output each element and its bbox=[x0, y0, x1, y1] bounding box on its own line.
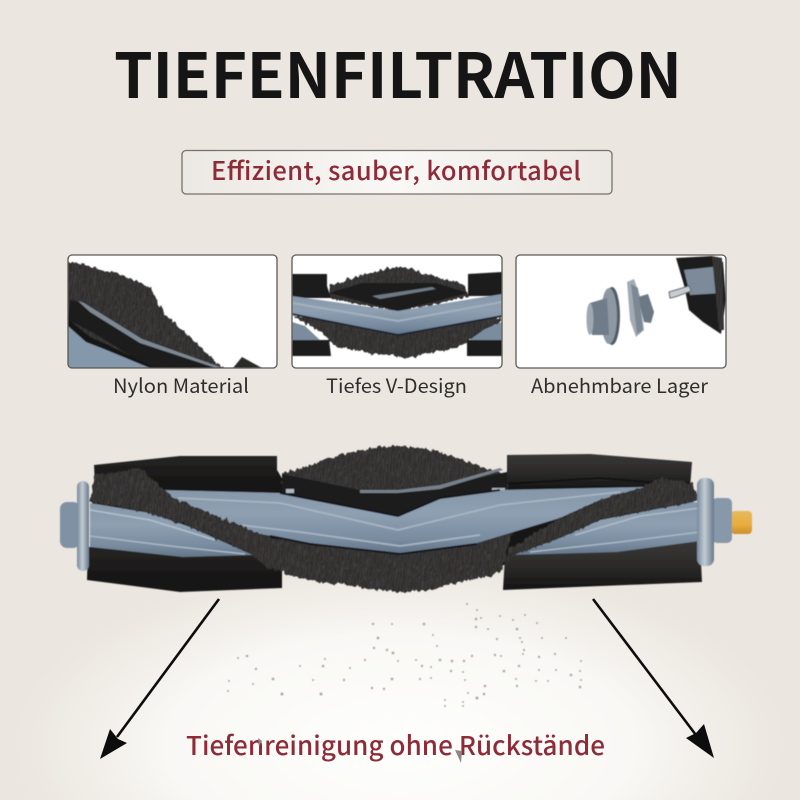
shaft bbox=[669, 286, 691, 298]
top bristles bbox=[329, 267, 470, 312]
center dark V bbox=[282, 472, 507, 517]
label: nylon material: Nylon Material bbox=[113, 370, 249, 399]
panel: deep V design bbox=[292, 255, 502, 368]
bearing ring bbox=[586, 287, 620, 345]
stray debris specks on caption bbox=[258, 738, 462, 763]
right end cap bbox=[697, 478, 752, 566]
center top bristles bbox=[282, 446, 507, 518]
label: removable bearing: Abnehmbare Lager bbox=[531, 370, 708, 399]
roller side pieces bbox=[292, 322, 321, 341]
left top fin bbox=[94, 456, 277, 493]
arrow: left bbox=[100, 599, 219, 759]
left end cap bbox=[60, 481, 89, 571]
subtitle box: Effizient, sauber, komfortabel bbox=[211, 151, 581, 188]
bristles close-up bbox=[66, 261, 225, 370]
bearing cap bbox=[627, 279, 654, 337]
bottom caption: Tiefenreinigung ohne Rückstände bbox=[186, 726, 605, 763]
bottom bristles bbox=[292, 316, 502, 358]
right roller section bbox=[513, 502, 701, 555]
left bottom fin bbox=[87, 547, 282, 592]
left diagonal bristles bbox=[90, 468, 300, 572]
panel: nylon material bbox=[66, 255, 277, 370]
lower fins bbox=[292, 340, 331, 356]
main roller brush bbox=[60, 446, 752, 593]
arrow: right bbox=[593, 599, 714, 758]
right diagonal bristles bbox=[507, 478, 698, 566]
bottom bristles bbox=[255, 530, 513, 593]
side fins bbox=[292, 274, 331, 298]
panel: removable bearing bbox=[516, 255, 726, 368]
right bottom fin bbox=[503, 541, 702, 590]
right top fin bbox=[507, 454, 692, 490]
left roller section bbox=[90, 503, 253, 557]
center V roller bbox=[160, 487, 645, 553]
body underlay bbox=[90, 470, 700, 570]
V roller bbox=[292, 294, 502, 334]
title: TIEFENFILTRATION bbox=[114, 26, 682, 116]
brush end fragment bbox=[676, 256, 726, 334]
label: V design: Tiefes V-Design bbox=[326, 370, 467, 399]
dust particles bbox=[227, 603, 582, 707]
